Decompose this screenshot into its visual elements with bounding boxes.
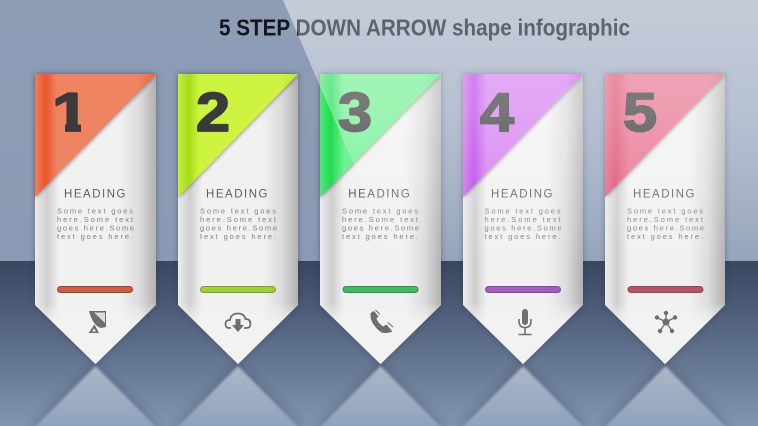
corner triangle (605, 74, 725, 197)
heading: HEADING (491, 188, 553, 200)
corner triangle (463, 74, 583, 197)
body text: text goes here. (627, 232, 703, 241)
icon: telephone (370, 310, 393, 333)
icon: microphone (518, 309, 532, 334)
body text (200, 206, 277, 241)
body text: goes here.Some (484, 224, 562, 232)
number 1: 1 (52, 81, 89, 143)
icon: network nodes (655, 311, 677, 333)
body text: Some text goes (57, 206, 133, 216)
heading: HEADING (64, 188, 126, 200)
body text: goes here.Some (57, 224, 134, 232)
number 3: 3 (338, 81, 372, 143)
heading: HEADING (633, 188, 695, 200)
body text: text goes here. (484, 232, 560, 241)
body text: here.Some text (57, 215, 134, 224)
body text: here.Some text (200, 215, 277, 224)
accent bar (343, 286, 418, 292)
reflection shadows (28, 360, 733, 426)
arrow body (605, 74, 725, 364)
body text: goes here.Some (342, 224, 419, 232)
body text: here.Some text (627, 215, 704, 224)
icon: cloud download (226, 314, 250, 332)
body text: Some text goes (200, 206, 276, 216)
number 5: 5 (623, 81, 657, 143)
body text (484, 206, 562, 241)
body text: goes here.Some (627, 224, 704, 232)
panel: step 5 (605, 74, 725, 364)
body text: Some text goes (342, 206, 418, 216)
heading: HEADING (206, 188, 268, 200)
accent bar (200, 286, 276, 292)
title: 5 STEP DOWN ARROW shape infographic (219, 14, 630, 40)
corner triangle (35, 74, 156, 197)
arrow body (178, 74, 298, 364)
corner triangle (178, 74, 298, 197)
body text: goes here.Some (200, 224, 277, 232)
floor (0, 261, 758, 426)
body text (342, 206, 419, 241)
body text: Some text goes (627, 206, 703, 216)
body text: Some text goes (484, 206, 561, 216)
floor reflections (34, 366, 727, 426)
body text: here.Some text (484, 215, 561, 224)
body text: text goes here. (200, 232, 276, 241)
body text: text goes here. (57, 232, 133, 241)
accent bar (486, 286, 560, 292)
arrow body (35, 74, 156, 364)
arrow body (320, 74, 441, 364)
accent bar (628, 286, 703, 292)
arrow body (463, 74, 583, 364)
panel: step 1 (35, 74, 156, 364)
body text (57, 206, 134, 241)
panel: step 2 (178, 74, 298, 364)
icon: satellite dish (88, 311, 106, 333)
panel: step 3 (320, 74, 441, 364)
number 2: 2 (196, 81, 230, 143)
body text (627, 206, 704, 241)
wall light band (283, 0, 758, 261)
body text: text goes here. (342, 232, 418, 241)
heading: HEADING (348, 188, 410, 200)
body text: here.Some text (342, 215, 419, 224)
corner triangle (320, 74, 441, 197)
number 4: 4 (480, 81, 514, 143)
panel: step 4 (463, 74, 583, 364)
background wall (0, 0, 758, 261)
light diagonal overlay (283, 0, 758, 261)
accent bar (58, 286, 132, 292)
